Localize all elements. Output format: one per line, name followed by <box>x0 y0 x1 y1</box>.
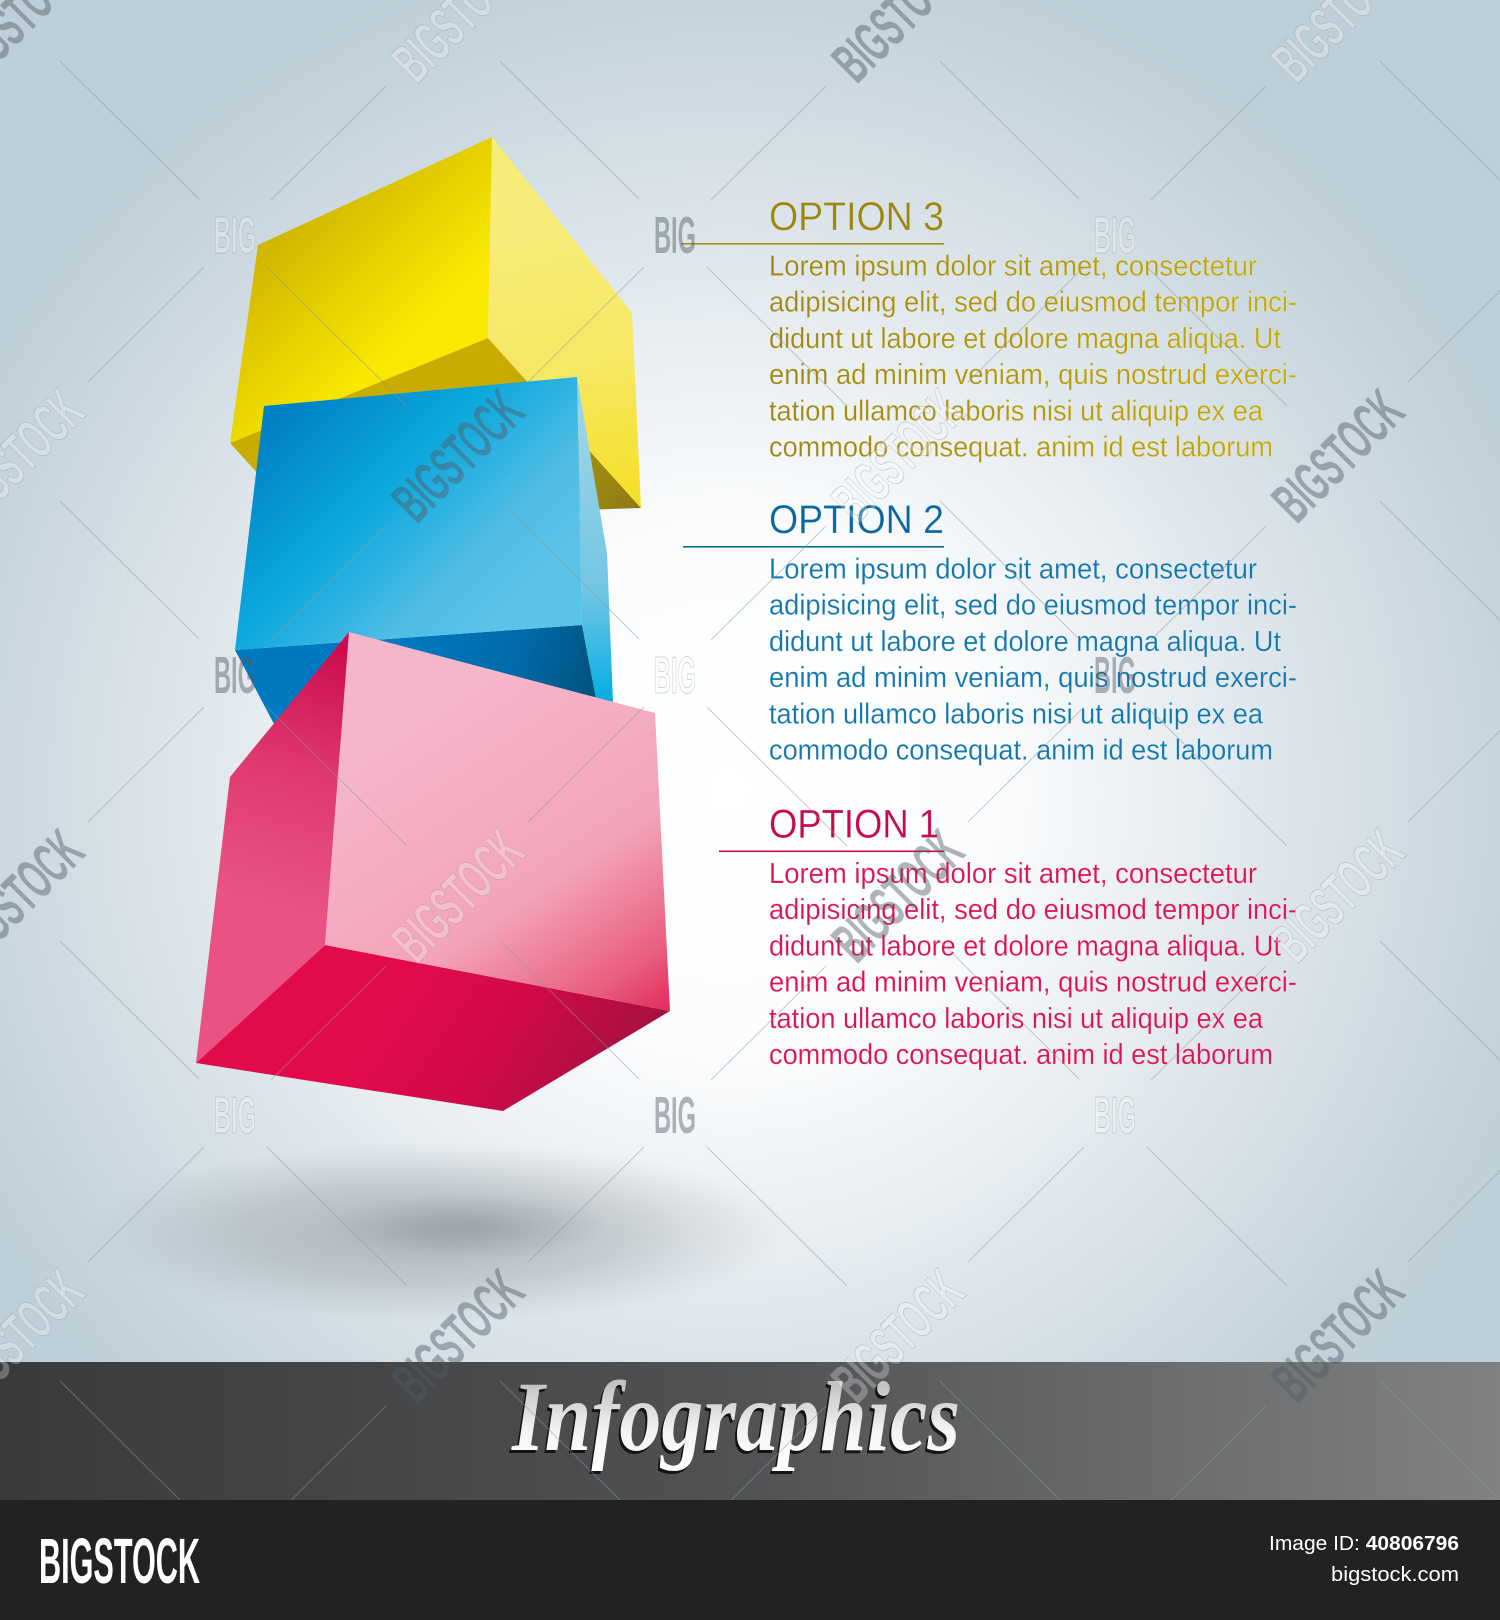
watermark: BIG labels: BIG <box>654 1087 696 1145</box>
watermark: BIG labels: BIG <box>654 207 696 265</box>
floor shadow <box>90 1142 790 1322</box>
text: BIGSTOCK <box>39 1525 200 1597</box>
watermark: BIGSTOCK labels: BIGSTOCK <box>380 818 536 974</box>
option 2 text block <box>683 498 1297 766</box>
watermark: BIG labels: BIG <box>654 647 696 705</box>
text: BIG <box>1094 207 1136 265</box>
option 3 body: Lorem ipsum dolor sit amet, consectetur <box>769 250 1257 282</box>
option 1 body: enim ad minim veniam, quis nostrud exerci- <box>769 967 1297 999</box>
option 1 body: Lorem ipsum dolor sit amet, consectetur <box>769 858 1257 890</box>
option 3 body: tation ullamco laboris nisi ut aliquip ex ea <box>769 395 1264 427</box>
site url: bigstock.com <box>1331 1564 1459 1586</box>
option 3 body: adipisicing elit, sed do eiusmod tempor inci- <box>769 287 1297 319</box>
option 2 body <box>769 554 1297 766</box>
option 3 text block <box>681 195 1297 464</box>
watermark: BIGSTOCK labels: BIGSTOCK <box>820 378 976 534</box>
yellow cube <box>230 137 641 520</box>
watermark: BIG labels <box>214 207 1136 1145</box>
pink cube <box>196 632 670 1111</box>
watermark: BIGSTOCK labels: BIGSTOCK <box>380 378 536 534</box>
option 3 body: didunt ut labore et dolore magna aliqua. Ut <box>769 323 1281 355</box>
image id: Image ID: 40806796 <box>1269 1533 1459 1555</box>
option 2 body: adipisicing elit, sed do eiusmod tempor inci- <box>769 590 1297 622</box>
option 1 body: adipisicing elit, sed do eiusmod tempor inci- <box>769 894 1297 926</box>
option 1 body <box>769 858 1297 1071</box>
option 3 body: enim ad minim veniam, quis nostrud exerci- <box>769 359 1297 391</box>
option 1 body: commodo consequat. anim id est laborum <box>769 1039 1273 1071</box>
footer bar <box>0 1500 1500 1620</box>
option 1 heading: OPTION 1 <box>769 802 939 846</box>
option 3 body <box>769 250 1297 464</box>
option 2 body: Lorem ipsum dolor sit amet, consectetur <box>769 554 1257 586</box>
watermark: BIGSTOCK labels: BIGSTOCK <box>820 1258 976 1414</box>
text: BIG <box>1094 1087 1136 1145</box>
watermark: BIG labels: BIG <box>214 207 256 265</box>
option 2 heading: OPTION 2 <box>769 498 944 542</box>
watermark: BIG labels: BIG <box>214 1087 256 1145</box>
banner title: Infographics <box>511 1361 960 1472</box>
title banner <box>0 1362 1500 1500</box>
text: BIG <box>1094 647 1136 705</box>
option 2 body: tation ullamco laboris nisi ut aliquip ex ea <box>769 698 1264 730</box>
option 2 body: didunt ut labore et dolore magna aliqua. Ut <box>769 626 1281 658</box>
option 2 body: commodo consequat. anim id est laborum <box>769 734 1273 766</box>
watermark: BIGSTOCK labels: BIGSTOCK <box>820 818 976 974</box>
option 3 body: commodo consequat. anim id est laborum <box>769 432 1273 464</box>
option 1 body: didunt ut labore et dolore magna aliqua. Ut <box>769 930 1281 962</box>
blue cube <box>235 377 613 760</box>
option 3 heading: OPTION 3 <box>769 195 944 239</box>
option 1 body: tation ullamco laboris nisi ut aliquip ex ea <box>769 1003 1264 1035</box>
watermark: BIG labels: BIG <box>214 647 256 705</box>
option 2 body: enim ad minim veniam, quis nostrud exerci- <box>769 662 1297 694</box>
watermark: BIGSTOCK labels: BIGSTOCK <box>380 1258 536 1414</box>
option 1 text block <box>719 802 1297 1071</box>
